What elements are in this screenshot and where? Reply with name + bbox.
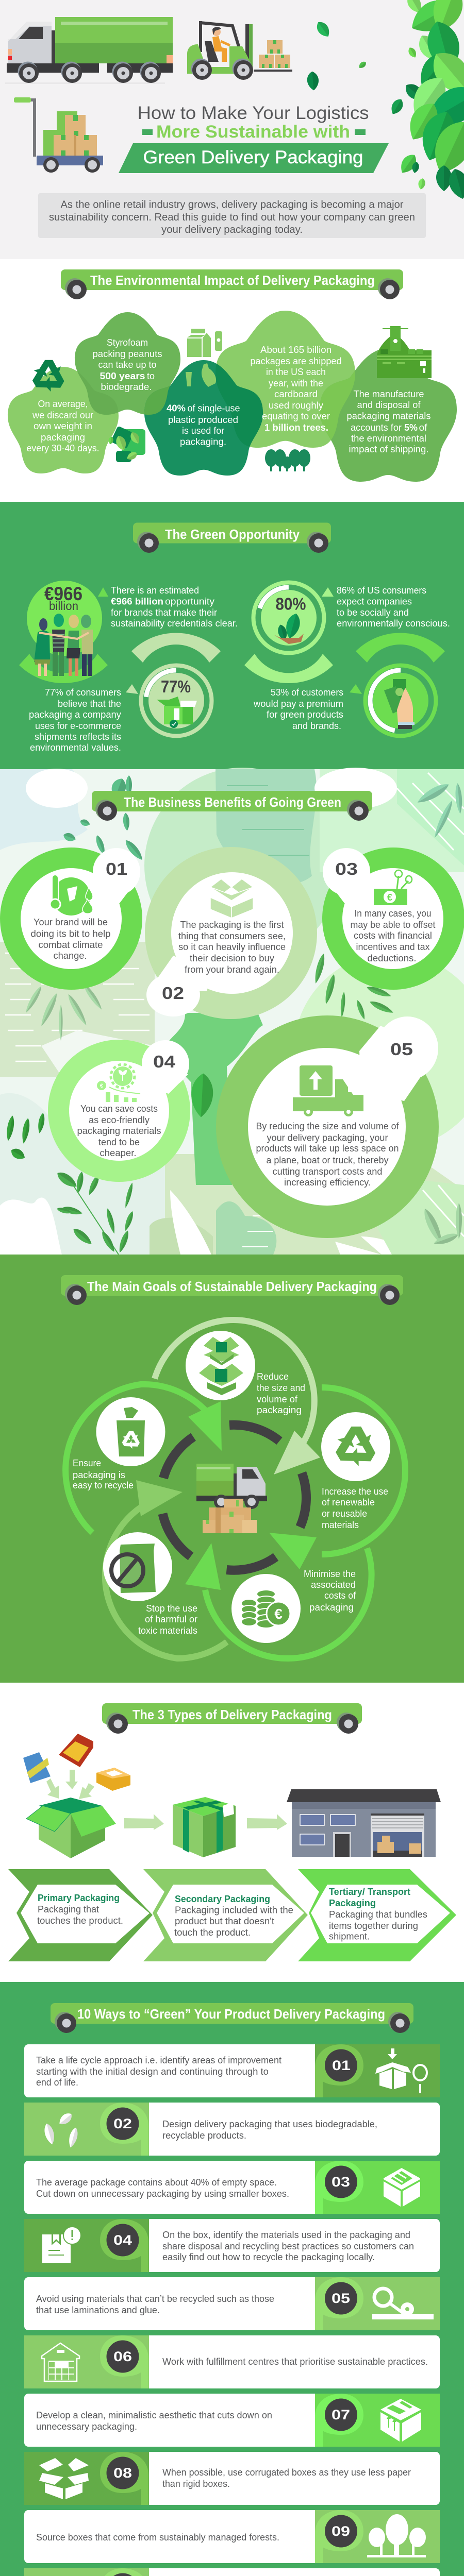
intro text block: As the online retail industry grows, delivery packaging is becoming a major xyxy=(61,199,404,210)
card 10 xyxy=(24,2568,440,2576)
stat: 966 billion with people xyxy=(19,581,238,683)
benefit 01: combat climate xyxy=(38,940,103,950)
chevron: secondary: Packaging included with the xyxy=(175,1905,293,1916)
icon: leaf recycling xyxy=(42,2111,79,2148)
chevron: secondary: touch the product. xyxy=(174,1927,251,1938)
text: manufacture: impact of shipping. xyxy=(349,444,429,454)
heading: business benefits xyxy=(92,791,372,821)
goal: reduce size: packaging xyxy=(257,1405,302,1415)
card 07: unnecessary packaging. xyxy=(36,2421,137,2432)
dark ring segments xyxy=(163,1425,306,1570)
text: manufacture: and disposal of xyxy=(357,400,421,410)
icon: forklift xyxy=(187,21,292,80)
goal: easy to recycle: easy to recycle xyxy=(73,1480,134,1490)
benefit 05 xyxy=(216,1015,439,1238)
card 06: 06 xyxy=(113,2349,132,2364)
chevron: primary: Primary Packaging xyxy=(38,1893,120,1903)
text: discard weight: On average, xyxy=(38,399,88,409)
icon: recycling symbol xyxy=(330,1427,380,1470)
heading: environmental impact xyxy=(61,269,403,299)
stat: 966 billion with people: There is an estimated xyxy=(111,585,199,596)
intro text block: your delivery packaging today. xyxy=(161,224,303,235)
benefit 02: thing that consumers see, xyxy=(178,931,286,941)
stat: 966 billion with people: sustainability credentials clear. xyxy=(111,618,238,629)
text: discard weight xyxy=(27,399,99,453)
icon: warehouse xyxy=(287,1789,441,1857)
benefit 05: By reducing the size and volume of xyxy=(256,1121,399,1131)
icon: secondary package box xyxy=(173,1797,236,1857)
icon: shipping box with arrows xyxy=(380,2399,421,2442)
text: billion packages xyxy=(251,345,341,433)
text: styrofoam: can take up to xyxy=(98,360,157,370)
panel: main goals xyxy=(0,1255,464,1683)
goal: minimise costs: Minimise the xyxy=(304,1569,356,1579)
chevron: tertiary: items together during xyxy=(329,1921,418,1931)
arrows into box xyxy=(46,1770,94,1799)
text: styrofoam: to xyxy=(147,371,155,381)
stat: 77 percent ring: environmental values. xyxy=(30,742,121,753)
card 03: The average package contains about 40% of empty space. xyxy=(36,2177,277,2188)
icon: product boxes xyxy=(23,1734,130,1791)
icon: gear and falling cost xyxy=(97,1064,140,1102)
benefit 04 xyxy=(48,1040,190,1182)
icon: open box xyxy=(39,2458,89,2499)
chevron: primary: Packaging that xyxy=(38,1904,99,1914)
card 07 xyxy=(24,2394,440,2447)
text: discard weight: own weight in xyxy=(34,421,92,431)
chevron: tertiary xyxy=(298,1869,456,1961)
benefit 04: You can save costs xyxy=(80,1104,158,1114)
title xyxy=(119,103,389,173)
icon: euro coins: € xyxy=(274,1606,283,1622)
goal: reduce size: the size and xyxy=(257,1383,305,1393)
icon: centre truck and boxes xyxy=(196,1464,267,1533)
card 09 xyxy=(24,2510,440,2563)
card 02: 02 xyxy=(113,2116,132,2131)
text: discard weight: we discard our xyxy=(32,410,93,420)
goal: renewable materials xyxy=(321,1412,390,1530)
icon: climate xyxy=(50,875,93,916)
goal: easy to recycle: Ensure xyxy=(73,1458,101,1468)
goal: minimise costs: packaging xyxy=(309,1602,354,1613)
benefit 02: from your brand again. xyxy=(185,964,279,975)
chevron: tertiary: Packaging xyxy=(329,1898,376,1908)
icon: primary package box xyxy=(26,1798,116,1858)
text: billion packages: About 165 billion xyxy=(260,345,332,355)
stat: 77 percent ring: 77% xyxy=(161,677,191,696)
benefit 05: cutting transport costs and xyxy=(272,1166,383,1177)
stat: 80 percent ring: to be socially and xyxy=(337,607,409,618)
icon: document with alert xyxy=(42,2227,81,2263)
icon: hand holding money xyxy=(384,679,415,729)
goal: stop toxic materials: of harmful or xyxy=(145,1614,197,1624)
stat: 77 percent ring xyxy=(29,666,211,753)
benefit 05: a plane, boat or truck, thereby xyxy=(266,1155,389,1165)
heading: green opportunity xyxy=(133,522,331,553)
benefit 04: cheaper. xyxy=(100,1148,136,1158)
card 09: 09 xyxy=(332,2523,350,2539)
goal: easy to recycle xyxy=(73,1397,165,1490)
icon: tape rolls xyxy=(372,2289,434,2319)
card 01: 01 xyxy=(332,2058,351,2073)
bubble shapes with overlaps xyxy=(8,311,457,482)
stat: 77 percent ring: uses for e-commerce xyxy=(35,721,121,731)
tree trunk xyxy=(161,1013,263,1185)
text: manufacture: accounts for xyxy=(351,422,402,433)
card 06: Work with fulfillment centres that prioritise sustainable practices. xyxy=(162,2357,428,2367)
card 08 xyxy=(24,2452,440,2505)
benefit 03 xyxy=(322,848,464,990)
card 02 xyxy=(24,2103,440,2156)
stat: 53 percent ring xyxy=(253,665,436,736)
goal: stop toxic materials xyxy=(103,1532,197,1636)
card 06 xyxy=(24,2335,440,2388)
text: manufacture: packaging materials xyxy=(346,411,431,421)
text: billion packages: 1 billion trees. xyxy=(264,422,328,433)
intro text block: sustainability concern. Read this guide to find out how your company can green xyxy=(49,212,415,223)
stat: 77 percent ring: shipments reflects its xyxy=(35,732,121,742)
chevron: tertiary: shipment. xyxy=(329,1931,370,1941)
text: billion packages: cardboard xyxy=(274,389,318,399)
stat: 80 percent ring: expect companies xyxy=(337,597,412,607)
heading: main goals xyxy=(61,1275,403,1305)
card 04: share disposal and recycling best practices so customers can xyxy=(162,2241,414,2251)
text: discard weight: packaging xyxy=(41,432,85,443)
icon: hand with plant xyxy=(274,612,304,644)
icon: milk carton and can xyxy=(187,329,222,357)
benefit 03: costs with financial xyxy=(354,930,432,941)
panel: 10 ways xyxy=(0,1982,464,2576)
icon: group of people xyxy=(34,614,93,676)
text: billion packages: equating to over xyxy=(262,411,330,421)
card 07: Develop a clean, minimalistic aesthetic that cuts down on xyxy=(36,2410,272,2420)
panel: business benefits xyxy=(0,768,464,1255)
benefit 05: 05 xyxy=(390,1040,413,1059)
stat: 53 percent ring: would pay a premium xyxy=(253,699,343,709)
panel: header xyxy=(0,0,464,259)
stat: 53 percent ring: and brands. xyxy=(292,721,341,731)
stat: 966 billion with people: for brands that make their xyxy=(111,607,217,618)
text: billion packages: used roughly xyxy=(269,400,323,411)
text: manufacture: The manufacture xyxy=(354,389,424,399)
card 05: 05 xyxy=(332,2291,350,2306)
card 01: end of life. xyxy=(36,2077,78,2088)
stat: 53 percent ring: for green products xyxy=(267,709,343,720)
cycle arrows xyxy=(65,1320,405,1658)
goal: stop toxic materials: toxic materials xyxy=(138,1625,197,1636)
text: styrofoam: Styrofoam xyxy=(107,337,148,348)
benefit 04: packaging materials xyxy=(77,1126,161,1136)
card 04: easily find out how to recycle the packaging locally. xyxy=(162,2252,375,2262)
text: manufacture: of xyxy=(419,422,428,433)
text: plastic: plastic produced xyxy=(168,415,238,425)
icon: trees xyxy=(265,449,310,471)
icon: euro coins xyxy=(241,1590,290,1628)
card 01 xyxy=(24,2044,440,2097)
panel: types of packaging xyxy=(0,1683,464,1982)
heading: 3 types: The 3 Types of Delivery Packaging xyxy=(132,1707,332,1722)
stat: 80 percent ring: 86% of US consumers xyxy=(337,585,426,596)
heading: business benefits: The Business Benefits of Going Green xyxy=(124,794,341,810)
icon: recycling bin xyxy=(117,1407,145,1456)
stat: 966 billion with people: €966 xyxy=(44,583,82,604)
icon: truck with up arrow xyxy=(293,1065,363,1116)
arrow xyxy=(124,1814,164,1830)
text: plastic: of single-use xyxy=(188,403,240,413)
arrow xyxy=(247,1814,287,1830)
icon: delivery truck xyxy=(5,17,173,84)
benefit 01 xyxy=(0,848,142,990)
card 07: 07 xyxy=(332,2407,350,2422)
text: billion packages: packages are shipped xyxy=(251,356,341,366)
goal: stop toxic materials: Stop the use xyxy=(146,1603,197,1614)
text: styrofoam xyxy=(93,337,162,392)
text: billion packages: year, with the xyxy=(269,378,323,388)
card 02: recyclable products. xyxy=(162,2130,246,2141)
icon: closed box xyxy=(384,2168,420,2207)
text: discard weight: every 30-40 days. xyxy=(27,443,99,453)
benefit 02: so it can heavily influence xyxy=(178,942,286,952)
title: More Sustainable with xyxy=(156,122,350,142)
benefit 02 xyxy=(145,847,317,1019)
chevron: secondary: product but that doesn't xyxy=(175,1916,274,1926)
icon: open box outline xyxy=(210,879,253,918)
arc connectors xyxy=(131,633,445,683)
goal: minimise costs xyxy=(231,1569,356,1643)
stat: 80 percent ring: environmentally conscious. xyxy=(337,618,450,629)
icon: recycling symbol xyxy=(28,360,68,395)
benefit 02: their decision to buy xyxy=(190,953,274,963)
card 08: 08 xyxy=(113,2465,132,2481)
goal: minimise costs: associated xyxy=(311,1580,356,1590)
benefit 03: may be able to offset xyxy=(351,920,435,930)
benefit 03: In many cases, you xyxy=(355,908,431,919)
stat: 77 percent ring: believe that the xyxy=(58,699,121,709)
chevron: secondary: Secondary Packaging xyxy=(175,1894,270,1904)
text: billion packages: in the US each xyxy=(266,367,326,377)
text: manufacture: 5% xyxy=(404,422,418,433)
icon: box and magnifier xyxy=(375,2048,427,2093)
icon: warehouse outline xyxy=(42,2343,79,2381)
icon: open box with check xyxy=(157,697,197,728)
text: manufacture: the environmental xyxy=(351,433,426,444)
chevron: tertiary: Packaging that bundles xyxy=(329,1909,427,1920)
heading: 10 ways: 10 Ways to “Green” Your Product Delivery Packaging xyxy=(77,2006,385,2022)
benefit 02: 02 xyxy=(162,984,184,1003)
stat: 80 percent ring xyxy=(251,580,450,656)
text: plastic xyxy=(167,403,240,447)
text: styrofoam: 500 years xyxy=(100,371,145,381)
stat: 77 percent ring: packaging a company xyxy=(29,709,121,720)
benefit 05: your delivery packaging, your xyxy=(267,1132,388,1143)
benefit 05: increasing efficiency. xyxy=(284,1177,371,1188)
icon: scissors cutting money: € xyxy=(387,892,392,903)
goal: reduce size xyxy=(186,1331,305,1415)
goal: renewable materials: or reusable xyxy=(322,1509,367,1519)
card 01: starting with the initial design and continuing through to xyxy=(36,2066,269,2077)
benefit 01: Your brand will be xyxy=(34,917,108,927)
text: plastic: packaging. xyxy=(180,437,226,447)
card 03: 03 xyxy=(332,2174,350,2190)
card 04: On the box, identify the materials used in the packaging and xyxy=(162,2230,410,2240)
foliage background xyxy=(0,768,464,1255)
icon: banned bag xyxy=(111,1544,156,1593)
card 03: Cut down on unnecessary packaging by using smaller boxes. xyxy=(36,2189,289,2199)
chevron: tertiary: Tertiary/ Transport xyxy=(329,1887,410,1897)
text: manufacture xyxy=(346,389,431,454)
goal: minimise costs: costs of xyxy=(324,1590,356,1601)
card 05: that use laminations and glue. xyxy=(36,2305,160,2315)
stat: 80 percent ring: 80% xyxy=(275,595,306,613)
goal: easy to recycle: packaging is xyxy=(73,1470,125,1480)
benefit 03: deductions. xyxy=(367,953,417,963)
card 05 xyxy=(24,2277,440,2330)
icon: nested open boxes xyxy=(199,1337,243,1395)
benefit 01: 01 xyxy=(106,859,127,878)
benefit 01: change. xyxy=(54,951,87,961)
card 04: 04 xyxy=(113,2232,132,2248)
benefit 03: incentives and tax xyxy=(356,942,430,952)
goal: renewable materials: of renewable xyxy=(322,1497,375,1507)
goal: renewable materials: Increase the use xyxy=(322,1486,388,1497)
heading: 3 types xyxy=(102,1703,362,1734)
card 09: Source boxes that come from sustainably managed forests. xyxy=(36,2532,279,2543)
benefit 04: 04 xyxy=(153,1052,176,1071)
text: plastic: is used for xyxy=(182,426,224,436)
heading: green opportunity: The Green Opportunity xyxy=(165,527,300,542)
stat: 966 billion with people: opportunity xyxy=(165,597,214,607)
benefit 02: The packaging is the first xyxy=(180,920,284,930)
card 03 xyxy=(24,2161,440,2214)
panel: the green opportunity xyxy=(0,502,464,769)
icon: hand trolley with parcels xyxy=(14,97,103,173)
benefit 04: tend to be xyxy=(98,1137,140,1147)
intro text block xyxy=(38,193,426,238)
benefit 03: 03 xyxy=(335,859,358,878)
icon: scissors cutting money xyxy=(374,870,412,905)
benefit 01: doing its bit to help xyxy=(31,928,110,939)
goal: reduce size: volume of xyxy=(257,1394,298,1404)
text: plastic: 40% xyxy=(167,403,186,413)
goal: renewable materials: materials xyxy=(322,1520,359,1530)
stat: 966 billion with people: billion xyxy=(49,599,78,613)
card 05: Avoid using materials that can’t be recycled such as those xyxy=(36,2294,274,2304)
heading: 10 ways xyxy=(51,2003,413,2033)
icon: bottle and cup xyxy=(186,363,216,387)
stat: 53 percent ring: 53% of customers xyxy=(271,687,343,698)
chevron: primary: touches the product. xyxy=(37,1916,123,1926)
card 02: Design delivery packaging that uses biodegradable, xyxy=(162,2119,377,2129)
card 08: When possible, use corrugated boxes as they use less paper xyxy=(162,2467,411,2478)
card 01: Take a life cycle approach i.e. identify areas of improvement xyxy=(36,2055,281,2065)
chevron: primary xyxy=(8,1869,153,1961)
text: styrofoam: biodegrade. xyxy=(101,382,152,392)
icon: leaves cluster xyxy=(108,426,145,462)
decorative leaves xyxy=(306,0,464,201)
icon: factory xyxy=(377,326,432,378)
text: styrofoam: packing peanuts xyxy=(93,349,162,359)
icon: trees xyxy=(367,2514,426,2557)
title: How to Make Your Logistics xyxy=(137,103,369,123)
benefit 05: products will take up less space on xyxy=(256,1143,399,1154)
heading: environmental impact: The Environmental Impact of Delivery Packaging xyxy=(90,273,375,288)
title: Green Delivery Packaging xyxy=(143,147,363,167)
goal: reduce size: Reduce xyxy=(257,1371,289,1382)
benefit 04: as eco-friendly xyxy=(89,1115,150,1125)
heading: main goals: The Main Goals of Sustainable Delivery Packaging xyxy=(87,1279,377,1294)
card 04 xyxy=(24,2219,440,2272)
chevron: secondary xyxy=(143,1869,308,1961)
card 08: than rigid boxes. xyxy=(162,2479,230,2489)
icon: gear and falling cost: € xyxy=(100,1083,103,1089)
stat: 966 billion with people: €966 billion xyxy=(111,597,163,607)
stat: 77 percent ring: 77% of consumers xyxy=(45,687,121,698)
panel: environmental impact xyxy=(7,269,457,482)
